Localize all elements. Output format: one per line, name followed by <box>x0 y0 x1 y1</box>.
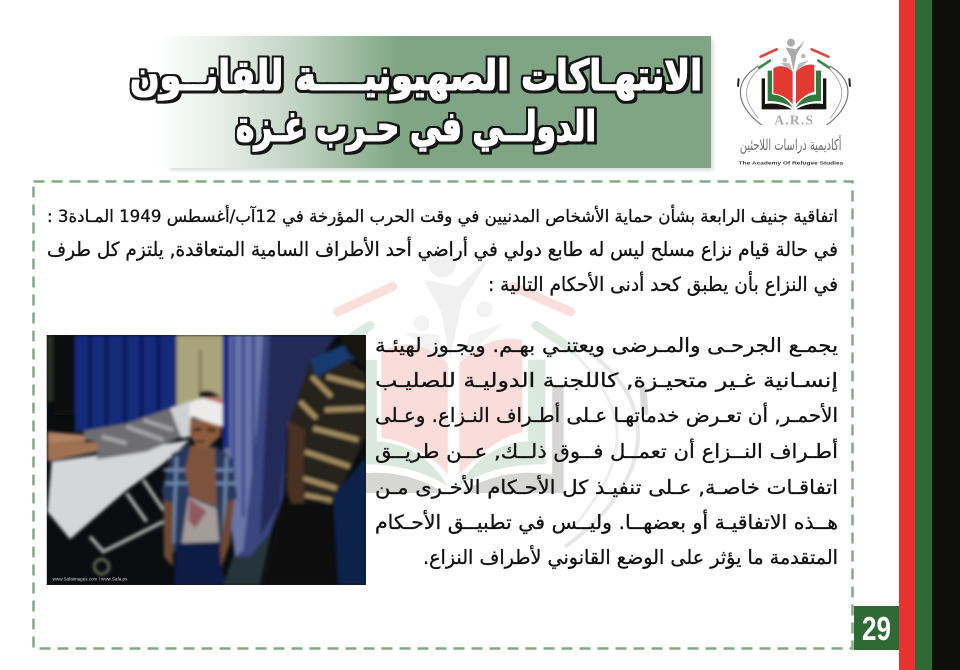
logo initials: A.R.S <box>774 112 814 127</box>
logo: Academy of Refugee Studies <box>738 39 850 165</box>
title banner <box>130 36 713 170</box>
page number: 29 <box>862 610 891 647</box>
body paragraph: إنسـانية غـير متحيـزة, كاللجنـة الدوليـة للصليـب <box>375 369 838 393</box>
logo Arabic calligraphy: أكاديمية دراسات اللاجئين <box>740 135 841 154</box>
page number <box>854 606 899 650</box>
watermark logo <box>260 250 645 547</box>
title line 2: الدولــي في حـرب غـزة <box>236 102 596 152</box>
body paragraph: اتفاقـات خاصـة, عـلى تنفيـذ كل الأحـكام الأخـرى مـن <box>375 475 838 499</box>
intro paragraph: في حالة قيام نزاع مسلح ليس له طابع دولي في أراضي أحد الأطراف السامية المتعاقدة, يلتزم كل طرف <box>47 237 838 261</box>
intro paragraph: في النزاع بأن يطبق كحد أدنى الأحكام التالية : <box>488 271 838 296</box>
title line 1: الانتهـاكات الصهيونيــــة للقانــون <box>130 51 702 101</box>
body paragraph: الأحمـر, أن تعـرض خدماتهـا عـلى أطـراف النـزاع. وعـلى <box>375 403 838 427</box>
body paragraph: يجمـع الجرحـى والمـرضى ويعتنـي بهـم. ويجـوز لهيئـة <box>375 334 838 357</box>
body paragraph: أطـراف النــزاع أن تعمــل فــوق ذلــك, عــن طريــق <box>375 439 838 463</box>
body paragraph: المتقدمة ما يؤثر على الوضع القانوني لأطراف النزاع. <box>423 545 838 569</box>
body paragraph: هــذه الاتفاقيـة أو بعضهــا. وليــس في تطبيــق الأحـكام <box>375 510 838 534</box>
intro paragraph <box>47 204 838 296</box>
logo English caption: The Academy Of Refugee Studies <box>739 160 844 165</box>
photo: wounded boy in hospital <box>47 335 366 585</box>
dashed content frame <box>34 182 852 648</box>
intro paragraph: اتفاقية جنيف الرابعة بشأن حماية الأشخاص المدنيين في وقت الحرب المؤرخة في 12آب/أغسطس 1949 المـادة3 : <box>47 204 838 227</box>
photo credit: www.Safaimages.com | www.Safa.ps <box>53 576 127 581</box>
side band stripes <box>899 0 960 670</box>
body paragraph <box>375 334 838 569</box>
